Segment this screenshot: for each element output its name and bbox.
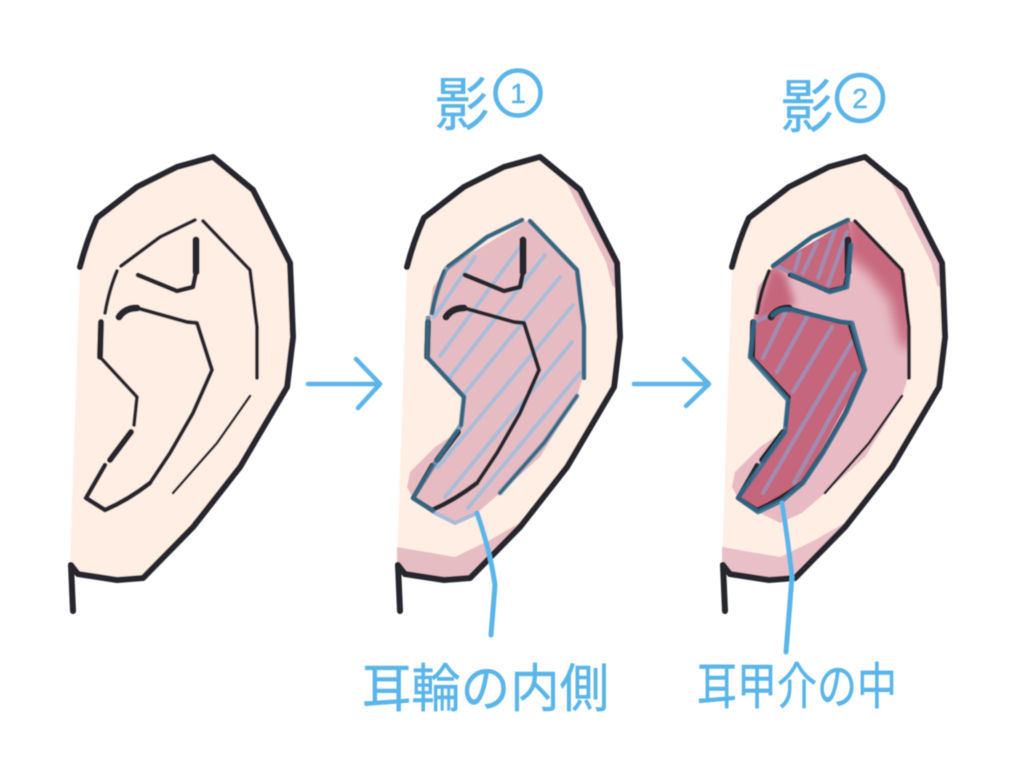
arrow 1	[308, 359, 380, 408]
ear 3 soft deep shading	[752, 212, 914, 350]
ear 2 inner shadow area	[407, 221, 585, 523]
ear 2 skin	[397, 157, 620, 580]
ear 2 lines	[398, 157, 620, 611]
ear 2: first shadow	[397, 157, 620, 635]
ear 3 bottom shadow	[722, 517, 855, 580]
heading: shadow 2: 2	[852, 83, 868, 114]
ear 3 lines	[723, 157, 945, 611]
heading: shadow 2: 影	[781, 75, 833, 140]
ear 3 skin	[722, 157, 945, 580]
ear 3 hatching	[757, 230, 855, 493]
label: inside of the helix: 耳輪の内側	[362, 661, 609, 719]
ear 2 leader line	[477, 513, 495, 635]
ear 2 bottom shadow	[397, 517, 530, 580]
ear 3: second shadow	[722, 157, 945, 652]
ear 3 leader line	[782, 503, 792, 652]
arrow 2	[634, 359, 709, 406]
heading: shadow 1: 影	[435, 73, 489, 138]
ear 1: base line drawing	[70, 157, 293, 611]
ear 2 right rim shadow	[565, 180, 619, 292]
ear 3 right rim shadow	[890, 180, 944, 292]
ear 2 blue contour overlay	[413, 220, 584, 511]
ear 3 inner mid tone	[732, 221, 910, 523]
heading: shadow 2	[781, 75, 883, 140]
ear 3 blue contours	[738, 220, 865, 512]
label: inside of the concha: 耳甲介の中	[697, 659, 897, 715]
heading: shadow 1: 1	[510, 78, 526, 109]
ear 3 deep shadow: upper	[773, 221, 851, 292]
ear 2 blue hatching	[433, 247, 580, 523]
heading: shadow 1	[435, 70, 540, 138]
ear 3 deep shadow: concha	[738, 310, 865, 512]
